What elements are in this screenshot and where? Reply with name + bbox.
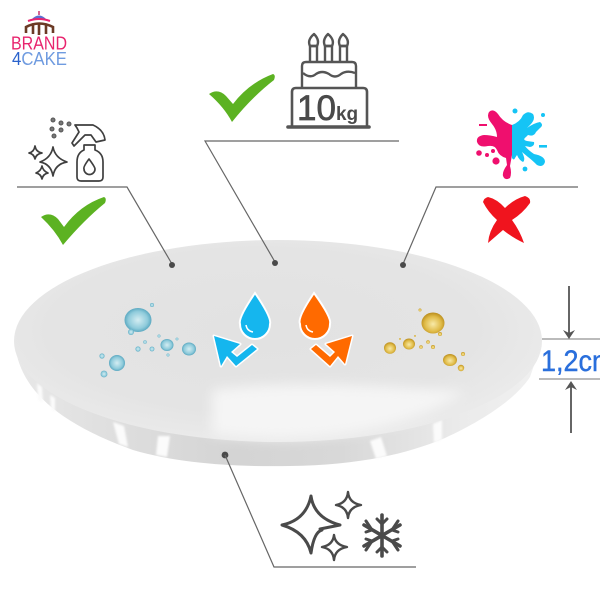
icon: orange arrow [311,336,352,366]
board side [15,345,541,466]
bottom arrow [565,381,577,433]
callout dots [169,260,406,458]
icon: spray bottle with sparkles [29,118,105,181]
board top surface [14,240,542,442]
icon: green check top [209,74,275,122]
dimension lines [539,339,600,379]
water droplets [99,303,196,377]
callout line: colour [403,187,578,264]
icon: blue arrow [214,336,257,366]
icon: red cross [483,196,530,243]
top arrow [563,286,575,339]
icon: blue drop [240,293,270,339]
oil droplets [384,308,465,371]
logo [11,11,67,69]
logo text: BRAND [11,34,67,54]
cake board [14,240,542,466]
callout line: freezer [225,455,416,567]
icon: orange drop [300,293,330,339]
thickness dimension [539,286,600,433]
cake drawing [288,34,369,127]
callout line: cleaning [17,187,172,264]
icon: green check left [41,197,106,245]
callout line: weight [205,141,399,262]
cake weight text: 10kg [297,89,358,128]
board glare [212,384,465,439]
icon: sparkles and snowflake [282,492,400,560]
logo cake dome [26,11,53,35]
icon: colour splash [476,108,547,179]
icon: cake 10kg [288,34,369,128]
logo: 4CAKE [12,49,67,69]
